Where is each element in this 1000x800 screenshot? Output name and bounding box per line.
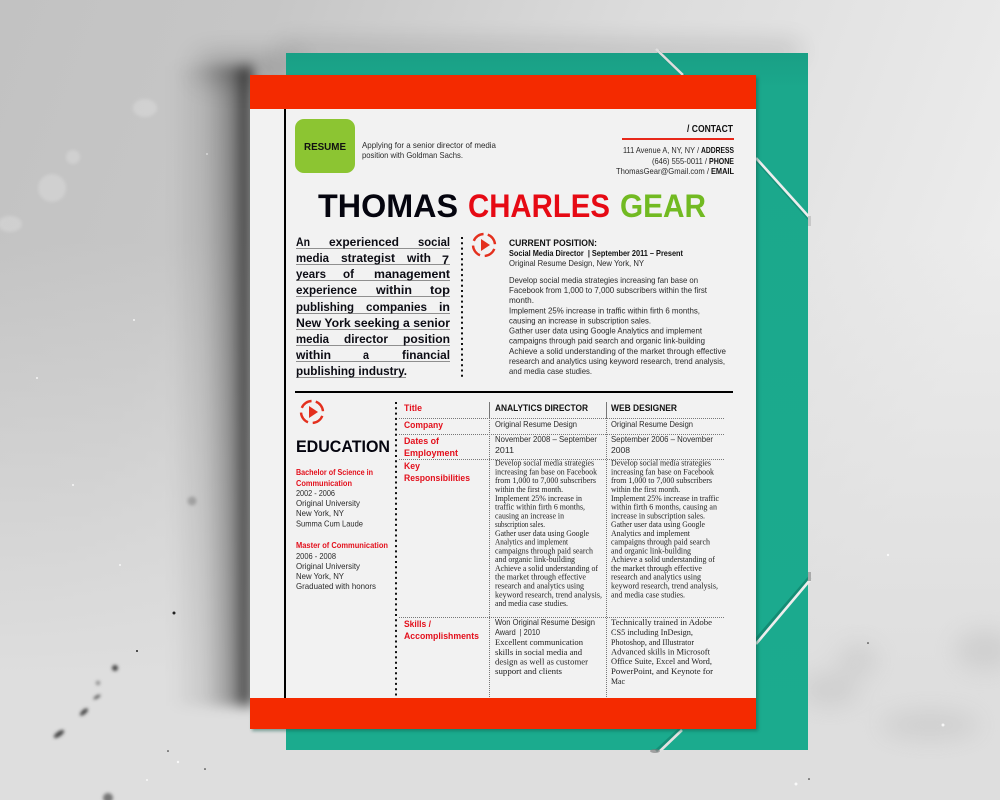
- column: analytics director: Develop social media strategies: [495, 459, 594, 468]
- column: analytics director: ANALYTICS DIRECTOR: [495, 403, 588, 414]
- education details: [296, 468, 388, 591]
- column: web designer: Achieve a solid understanding of: [611, 555, 715, 564]
- name title: [318, 188, 706, 224]
- summary statement: media: [296, 332, 329, 346]
- summary statement: a: [363, 348, 369, 362]
- column: web designer: Gather user data using Google: [611, 520, 705, 529]
- current position text: Develop social media strategies increasing fan base on: [509, 276, 698, 285]
- column: web designer: increase in subscription sales.: [611, 511, 705, 520]
- contact block: EMAIL: [711, 167, 734, 176]
- column: web designer: Implement 25% increase in traffic: [611, 494, 719, 503]
- summary statement: publishing: [296, 300, 354, 314]
- column: analytics director: research and analytics using: [495, 582, 585, 590]
- current position text: Achieve a solid understanding of the market through effective: [509, 347, 726, 356]
- column: web designer: within firth 6 months, causing an: [611, 503, 718, 512]
- column: analytics director: design as well as customer: [495, 658, 588, 666]
- application note: position with Goldman Sachs.: [362, 151, 463, 160]
- column: web designer: Advanced skills in Microsoft: [611, 648, 711, 656]
- column: analytics director: [495, 403, 602, 676]
- summary statement: experienced: [329, 235, 399, 249]
- summary statement: strategist: [341, 251, 395, 265]
- contact block: ADDRESS: [701, 146, 734, 155]
- summary statement: position: [403, 332, 450, 346]
- summary statement: within: [375, 283, 412, 297]
- education details: Summa Cum Laude: [296, 520, 363, 528]
- column: web designer: Develop social media strategies: [611, 459, 711, 468]
- column: analytics director: increasing fan base on Facebook: [495, 468, 598, 476]
- teal folder: [286, 53, 808, 750]
- contact block: (646) 555-0011 /: [652, 157, 708, 166]
- column: web designer: increasing fan base on Facebook: [611, 468, 715, 476]
- summary statement: with: [406, 251, 431, 265]
- row labels: Title: [404, 403, 422, 414]
- column: web designer: Original Resume Design: [611, 420, 693, 429]
- contact block: / CONTACT: [687, 124, 733, 135]
- summary statement: media: [296, 251, 329, 265]
- education details: Graduated with honors: [296, 582, 376, 591]
- row labels: Responsibilities: [404, 473, 470, 484]
- current position text: Gather user data using Google Analytics and implement: [509, 326, 703, 336]
- column: analytics director: subscription sales.: [495, 520, 545, 529]
- column: analytics director: and media case studies.: [495, 599, 568, 608]
- column: web designer: within the first month.: [611, 485, 680, 494]
- education details: Master of Communication: [296, 541, 388, 550]
- row labels: Accomplishments: [404, 631, 479, 642]
- elastic strap: right upper: [756, 158, 811, 226]
- summary statement: director: [344, 332, 388, 346]
- current position text: month.: [509, 296, 534, 305]
- icon: play target, current position: [470, 231, 498, 259]
- column: analytics director: support and clients: [495, 667, 562, 676]
- column: web designer: the market through effective: [611, 564, 702, 573]
- summary statement: top: [430, 283, 450, 297]
- column: web designer: Technically trained in Adobe: [611, 618, 712, 627]
- contact block: 111 Avenue A, NY, NY /: [623, 146, 700, 155]
- application note: Applying for a senior director of media: [362, 141, 496, 150]
- education details: 2002 - 2006: [296, 489, 335, 498]
- elastic strap: top: [656, 49, 685, 77]
- column: web designer: PowerPoint, and Keynote for: [611, 667, 713, 676]
- column: web designer: September 2006 – November: [611, 435, 713, 444]
- column: analytics director: Award | 2010: [495, 628, 540, 637]
- column: analytics director: traffic within firth 6 months,: [495, 503, 585, 512]
- column: analytics director: causing an increase in: [495, 511, 565, 520]
- summary statement: experience: [296, 283, 357, 297]
- current position text: Implement 25% increase in traffic within firth 6 months,: [509, 306, 700, 316]
- column: web designer: and media case studies.: [611, 590, 685, 599]
- column: web designer: from 1,000 to 7,000 subscribers: [611, 476, 712, 485]
- current position text: and media case studies.: [509, 367, 592, 376]
- row labels: Employment: [404, 448, 459, 459]
- column: web designer: campaigns through paid search: [611, 538, 711, 547]
- summary statement: An: [296, 235, 310, 249]
- column: analytics director: Analytics and implement: [495, 538, 569, 547]
- column: web designer: Mac: [611, 677, 625, 686]
- experience table: [399, 402, 725, 698]
- column: analytics director: November 2008 – September: [495, 435, 597, 444]
- row labels: Company: [404, 420, 444, 431]
- application note: [362, 141, 496, 160]
- summary statement: within: [295, 348, 331, 362]
- summary statement: years: [296, 267, 326, 281]
- column: web designer: 2008: [611, 446, 630, 455]
- education details: Original University: [296, 499, 361, 508]
- summary statement: in: [439, 300, 450, 314]
- column: analytics director: 2011: [495, 446, 514, 455]
- contact block: [616, 124, 734, 176]
- summary statement: companies: [366, 300, 427, 314]
- elastic strap: bottom: [650, 729, 682, 753]
- resume badge: [295, 119, 355, 173]
- elastic strap: right lower: [756, 572, 811, 644]
- education details: 2006 - 2008: [296, 552, 336, 561]
- summary statement: publishing industry.: [296, 364, 407, 378]
- current position text: [509, 238, 726, 376]
- current position text: Facebook from 1,000 to 7,000 subscribers within the first: [509, 286, 708, 295]
- column: analytics director: and organic link-building: [495, 555, 576, 564]
- education details: New York, NY: [296, 509, 345, 518]
- column: web designer: WEB DESIGNER: [611, 403, 677, 414]
- column: web designer: and organic link-building: [611, 546, 692, 555]
- column: analytics director: from 1,000 to 7,000 subscribers: [495, 476, 596, 485]
- name title: THOMAS: [318, 188, 458, 224]
- column: web designer: CS5 including InDesign,: [611, 628, 693, 637]
- resume badge: RESUME: [304, 141, 346, 153]
- column: analytics director: Excellent communication: [495, 638, 584, 647]
- icon: play target, education: [298, 398, 326, 426]
- column: web designer: Office Suite, Excel and Word,: [611, 657, 712, 666]
- summary statement: financial: [402, 348, 450, 362]
- bottom red band: [250, 698, 756, 729]
- column: analytics director: Achieve a solid understanding of: [495, 564, 598, 573]
- column: analytics director: campaigns through paid search: [495, 546, 594, 555]
- education heading: EDUCATION: [296, 438, 390, 456]
- name title: GEAR: [620, 188, 706, 224]
- left vertical rule: [284, 109, 286, 698]
- column: analytics director: Won Original Resume Design: [495, 618, 595, 627]
- row labels: Key: [404, 461, 421, 472]
- table grid: [399, 402, 725, 698]
- current position text: Social Media Director | September 2011 – Present: [509, 249, 683, 258]
- contact block: ThomasGear@Gmail.com /: [616, 167, 710, 176]
- page drop shadow: [170, 42, 800, 706]
- column: web designer: Photoshop, and Illustrator: [611, 638, 694, 647]
- column: analytics director: keyword research, trend analysis,: [495, 590, 602, 599]
- summary statement: [295, 235, 450, 378]
- name title: CHARLES: [468, 188, 610, 224]
- row labels: [404, 403, 479, 642]
- row labels: Skills /: [404, 619, 431, 630]
- column: web designer: [611, 403, 719, 686]
- current position text: research and analytics using keyword research, trend analysis,: [509, 357, 725, 366]
- resume page: [250, 75, 758, 731]
- current position text: CURRENT POSITION:: [509, 238, 597, 249]
- education details: Original University: [296, 562, 361, 571]
- row labels: Dates of: [404, 436, 440, 447]
- column: analytics director: Implement 25% increase in: [495, 494, 583, 503]
- column: web designer: keyword research, trend analysis,: [611, 582, 718, 590]
- column: analytics director: the market through effective: [495, 573, 586, 582]
- top red band: [250, 75, 756, 109]
- current position text: Original Resume Design, New York, NY: [509, 259, 645, 268]
- education details: New York, NY: [296, 572, 345, 581]
- column: analytics director: Gather user data using Google: [495, 529, 589, 538]
- education details: Communication: [296, 479, 352, 488]
- education details: Bachelor of Science in: [296, 468, 373, 477]
- column: web designer: research and analytics using: [611, 573, 702, 582]
- column: analytics director: Original Resume Design: [495, 420, 577, 429]
- column: web designer: Analytics and implement: [611, 529, 691, 538]
- current position text: campaigns through paid search and organic link-building: [509, 336, 705, 346]
- summary statement: 7: [442, 253, 449, 267]
- column: analytics director: skills in social media and: [495, 648, 583, 657]
- summary statement: New York seeking a senior: [296, 316, 450, 330]
- column: analytics director: within the first month.: [495, 485, 563, 494]
- summary statement: of: [343, 267, 355, 281]
- contact block: PHONE: [709, 157, 734, 166]
- summary statement: management: [374, 267, 450, 281]
- current position text: causing an increase in subscription sales.: [509, 316, 651, 326]
- summary statement: social: [418, 235, 450, 249]
